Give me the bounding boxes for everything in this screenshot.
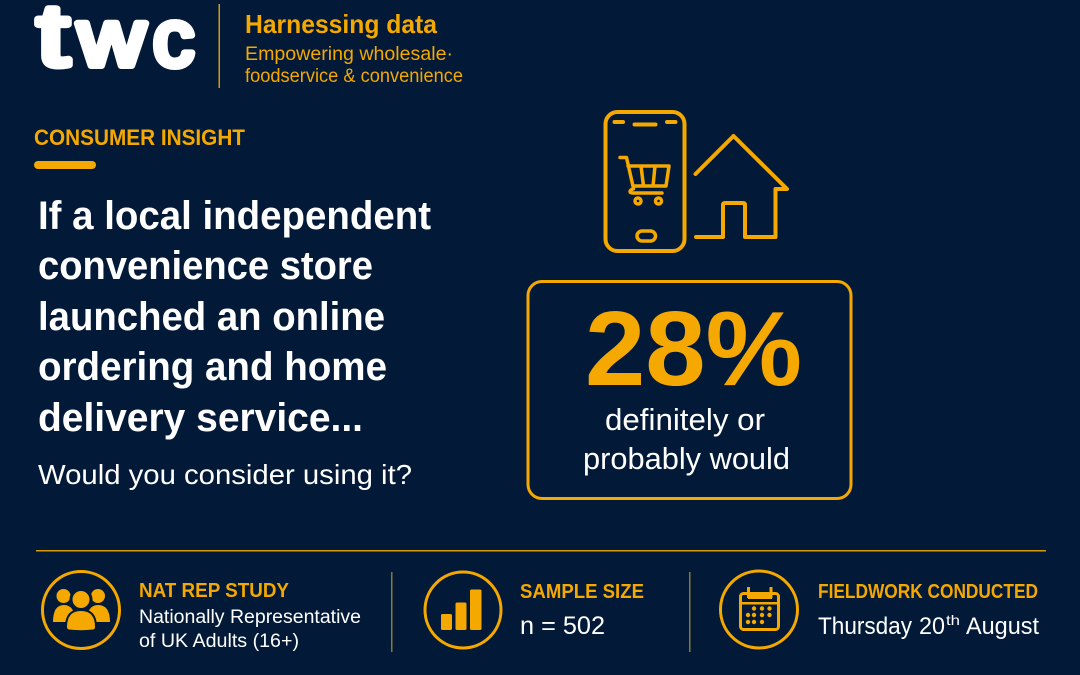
headline question: launched an online <box>38 295 385 339</box>
icon: calendar <box>720 571 798 648</box>
footer item: fieldwork conducted: Thursday <box>818 613 912 640</box>
footer item: fieldwork conducted <box>720 571 1039 648</box>
footer item: fieldwork conducted: FIELDWORK CONDUCTED <box>818 581 1038 603</box>
cart <box>620 158 669 204</box>
footer divider <box>391 572 392 652</box>
section label: consumer insight <box>34 125 246 169</box>
footer item: sample size <box>425 572 644 648</box>
stat panel: 28%: 28% <box>585 290 802 408</box>
tagline <box>245 9 463 87</box>
headline question: delivery service... <box>38 396 363 440</box>
footer rule <box>36 550 1046 552</box>
logo: twc <box>37 0 194 84</box>
footer item: sample size: SAMPLE SIZE <box>520 581 644 603</box>
headline question: ordering and home <box>38 345 387 389</box>
icon: people <box>42 572 120 648</box>
footer item: fieldwork conducted: 20 <box>919 613 945 640</box>
house <box>696 136 787 237</box>
phone home button <box>637 231 656 241</box>
icon: bar chart <box>425 572 501 648</box>
stat panel: 28% <box>528 282 851 498</box>
phone top details <box>614 122 676 124</box>
tagline: Harnessing data <box>245 9 438 39</box>
tagline: foodservice & convenience <box>245 65 463 87</box>
sub question: Would you consider using it? <box>38 459 412 490</box>
logo divider <box>218 4 220 88</box>
headline question <box>38 194 431 440</box>
phone body <box>606 112 684 251</box>
footer item: nat rep study: Nationally Representative <box>139 607 361 628</box>
footer item: sample size: n = 502 <box>520 612 605 640</box>
headline question: If a local independent <box>38 194 431 238</box>
footer divider <box>689 572 690 652</box>
footer item: fieldwork conducted: August <box>966 613 1039 640</box>
stat panel: 28%: probably would <box>583 441 790 476</box>
footer item: nat rep study: NAT REP STUDY <box>139 580 290 602</box>
section label: consumer insight: CONSUMER INSIGHT <box>34 125 246 150</box>
footer item: nat rep study <box>42 572 361 652</box>
headline question: convenience store <box>38 244 373 288</box>
icon: phone with cart and house <box>606 112 787 251</box>
footer item: nat rep study: of UK Adults (16+) <box>139 631 299 652</box>
footer item: fieldwork conducted: th <box>946 612 960 628</box>
tagline: Empowering wholesale· <box>245 43 453 65</box>
stat panel: 28%: definitely or <box>605 402 765 437</box>
